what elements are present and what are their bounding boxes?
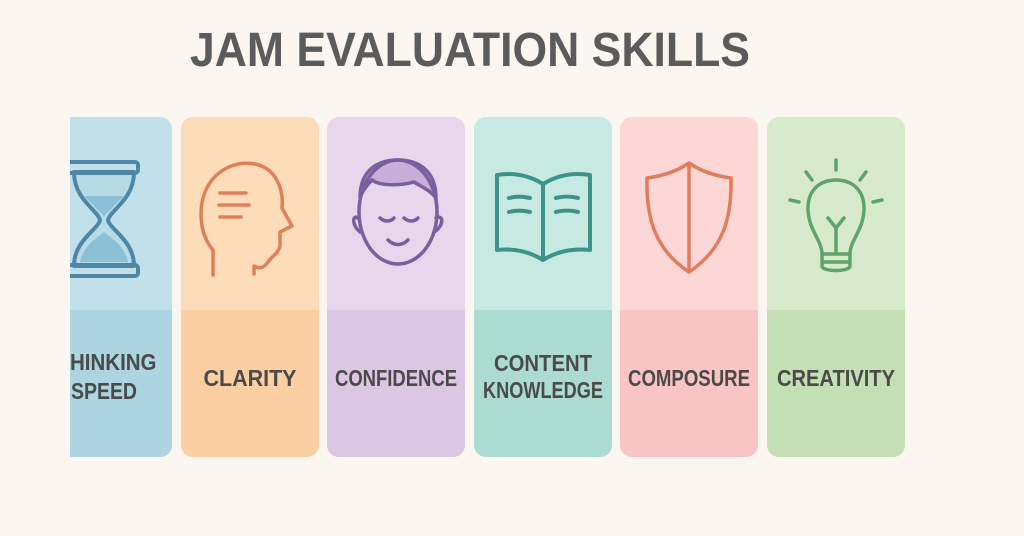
- label: content knowledge: KNOWLEDGE: [483, 377, 603, 403]
- label: thinking speed: SPEED: [71, 378, 137, 404]
- panel: content knowledge: [474, 117, 612, 457]
- label: content knowledge: [483, 350, 603, 403]
- label: confidence: CONFIDENCE: [335, 365, 457, 391]
- icon: light bulb: [790, 160, 882, 270]
- panel: clarity: [181, 117, 319, 457]
- icon: hourglass: [66, 162, 138, 276]
- icon: head: [201, 163, 292, 275]
- title: JAM EVALUATION SKILLS: [190, 24, 750, 77]
- label: creativity: CREATIVITY: [777, 365, 895, 391]
- label: content knowledge: CONTENT: [494, 350, 592, 376]
- icon: shield: [647, 163, 731, 272]
- label: thinking speed: [71, 354, 156, 399]
- label: composure: COMPOSURE: [628, 365, 750, 391]
- panel: creativity: [767, 117, 905, 457]
- panel: composure: [620, 117, 758, 457]
- icon: book: [497, 174, 590, 260]
- panel: thinking speed: [70, 117, 172, 457]
- label: thinking speed: THINKING: [58, 349, 156, 375]
- panel: confidence: [327, 117, 465, 457]
- icon: face: [354, 160, 442, 264]
- label: clarity: CLARITY: [204, 365, 296, 391]
